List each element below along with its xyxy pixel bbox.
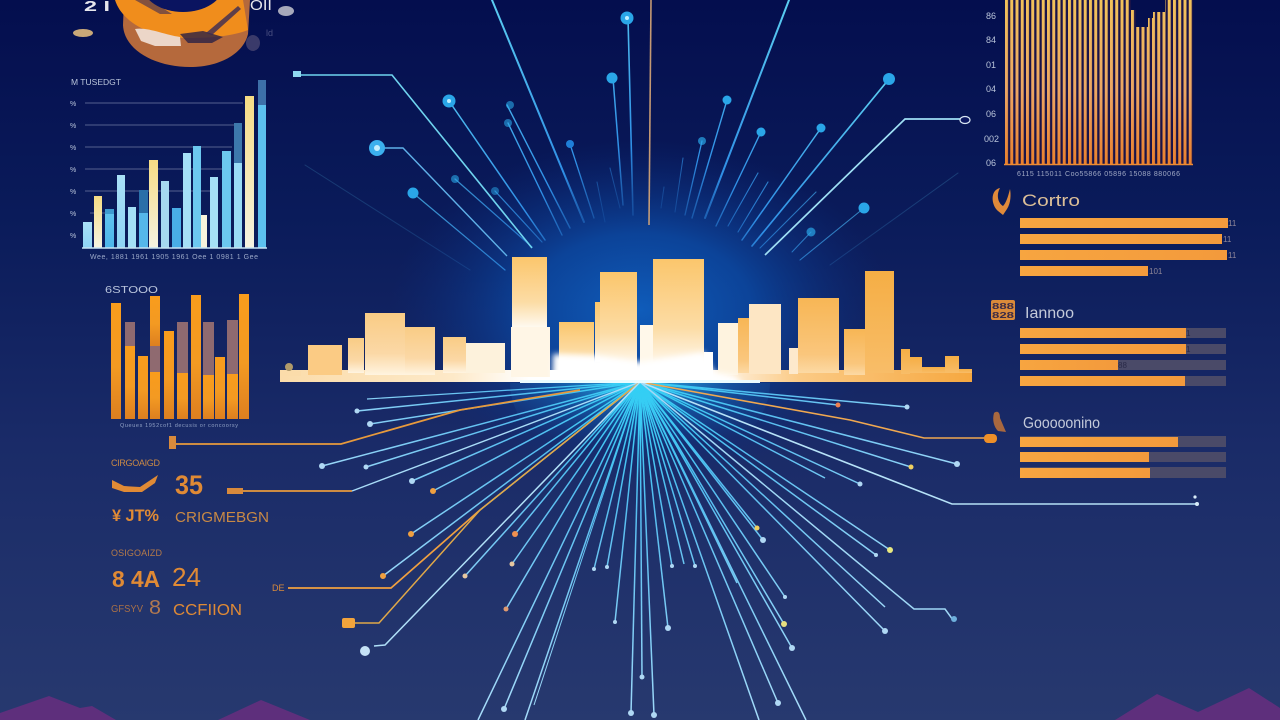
y axis labels: 86 [986,11,996,21]
orange bars [111,294,249,419]
center buildings [511,257,713,377]
far right buildings [865,271,972,374]
right connector: orange [640,382,997,443]
left connector: orange two [227,382,640,494]
bar values: 88 [1118,361,1127,370]
group heading: Gooooonino [1023,415,1100,432]
blue bar chart [70,78,267,261]
bars [1020,437,1178,478]
left buildings [281,313,505,376]
right connector: lower [640,382,957,622]
stat one value: 35 [175,470,203,500]
right bars group one [993,188,1237,276]
lower fan glow [510,383,770,473]
right bars group three [993,412,1226,478]
bar values: 1 [1186,329,1191,338]
y axis labels: % [70,123,76,130]
chart title: 6STOOO [105,285,158,296]
left connector: orange square [342,382,640,628]
left connector: orange three [272,382,640,593]
y axis labels: % [70,211,76,218]
stat two value: 24 [172,562,201,592]
y axis labels: % [70,189,76,196]
y axis labels: 01 [986,60,996,70]
bars [1020,218,1228,276]
right connector: long pale line [640,382,1199,506]
icon: badge: 828 [992,311,1015,320]
y axis labels: 06 [986,109,996,119]
orange bar chart [105,285,249,429]
x axis [82,247,267,249]
icon: badge [991,300,1015,320]
left connector: pale blob [360,382,640,656]
chart title: M TUSEDGT [71,78,121,87]
icon: badge: 888 [992,302,1015,311]
stat two glyph: 8 [149,597,161,619]
left stats block [111,458,269,619]
y axis labels [70,101,76,240]
icon: bulb [993,188,1011,215]
lower light rays [322,382,957,720]
stat one label: CRIGMEBGN [175,509,269,526]
lower ray end dots [319,402,960,718]
upper left connector: dot [369,140,507,256]
axis base [1004,164,1193,166]
central blue glow [390,140,890,480]
tracks [1020,328,1226,386]
upper right connector [765,116,970,255]
skyline center light [552,352,745,386]
city skyline [280,257,972,386]
bar values [1118,329,1191,370]
group heading: Iannoo [1025,305,1074,322]
y axis labels: 04 [986,84,996,94]
stat one heading: CIRGOAIGD [111,458,160,468]
stripes [1005,0,1193,165]
bar values: 11 [1228,251,1237,260]
y axis labels: 002 [984,134,999,144]
left connector: orange three: DE [272,583,285,593]
stat one icon [112,475,158,492]
y axis labels [984,11,999,168]
stat two heading: OSIGOAIZD [111,548,162,558]
top right striped bar chart [984,0,1193,178]
donut labels and small icons [73,0,294,51]
stat one icon row: ¥ JT% [112,506,159,525]
y axis labels: % [70,145,76,152]
bar values: 1 [1186,345,1191,354]
x axis caption: 6115 115011 Coo55866 05896 15088 880066 [1017,171,1180,178]
bar values: 101 [1149,267,1163,276]
decorative purple mountains [0,688,1280,720]
y axis labels: % [70,167,76,174]
bars [83,80,266,248]
stat two label: CCFIION [173,602,242,619]
orange vertical ray [649,0,651,225]
donut labels and small icons: ld [266,28,273,38]
caption: Queues 1952cof1 decusis or concoorsy [120,423,238,429]
x axis caption: Wee, 1881 1961 1905 1961 Oee 1 0981 1 Gee [90,254,258,261]
bar values: 11 [1223,235,1232,244]
y axis labels: 06 [986,158,996,168]
upper light rays [305,0,958,270]
icon: figure [993,412,1006,432]
stat two icon: 8 4A [112,566,160,592]
stat two small label: GFSYV [111,604,143,615]
faded bar tops [125,320,238,377]
y axis labels: % [70,233,76,240]
upper ray end dots [408,12,895,236]
right bars group two [991,300,1226,386]
right buildings [718,298,865,375]
y axis labels: % [70,101,76,108]
left connector: orange one [169,390,580,449]
group heading: Cortro [1022,191,1080,210]
upper left connector: top [293,71,532,248]
donut chart at top [115,0,250,67]
tracks [1020,436,1226,478]
grid lines [85,103,243,213]
horizon glow line [520,380,760,383]
bar values: 11 [1228,219,1237,228]
bars [1020,328,1186,386]
bar values [1149,219,1237,276]
y axis labels: 84 [986,35,996,45]
